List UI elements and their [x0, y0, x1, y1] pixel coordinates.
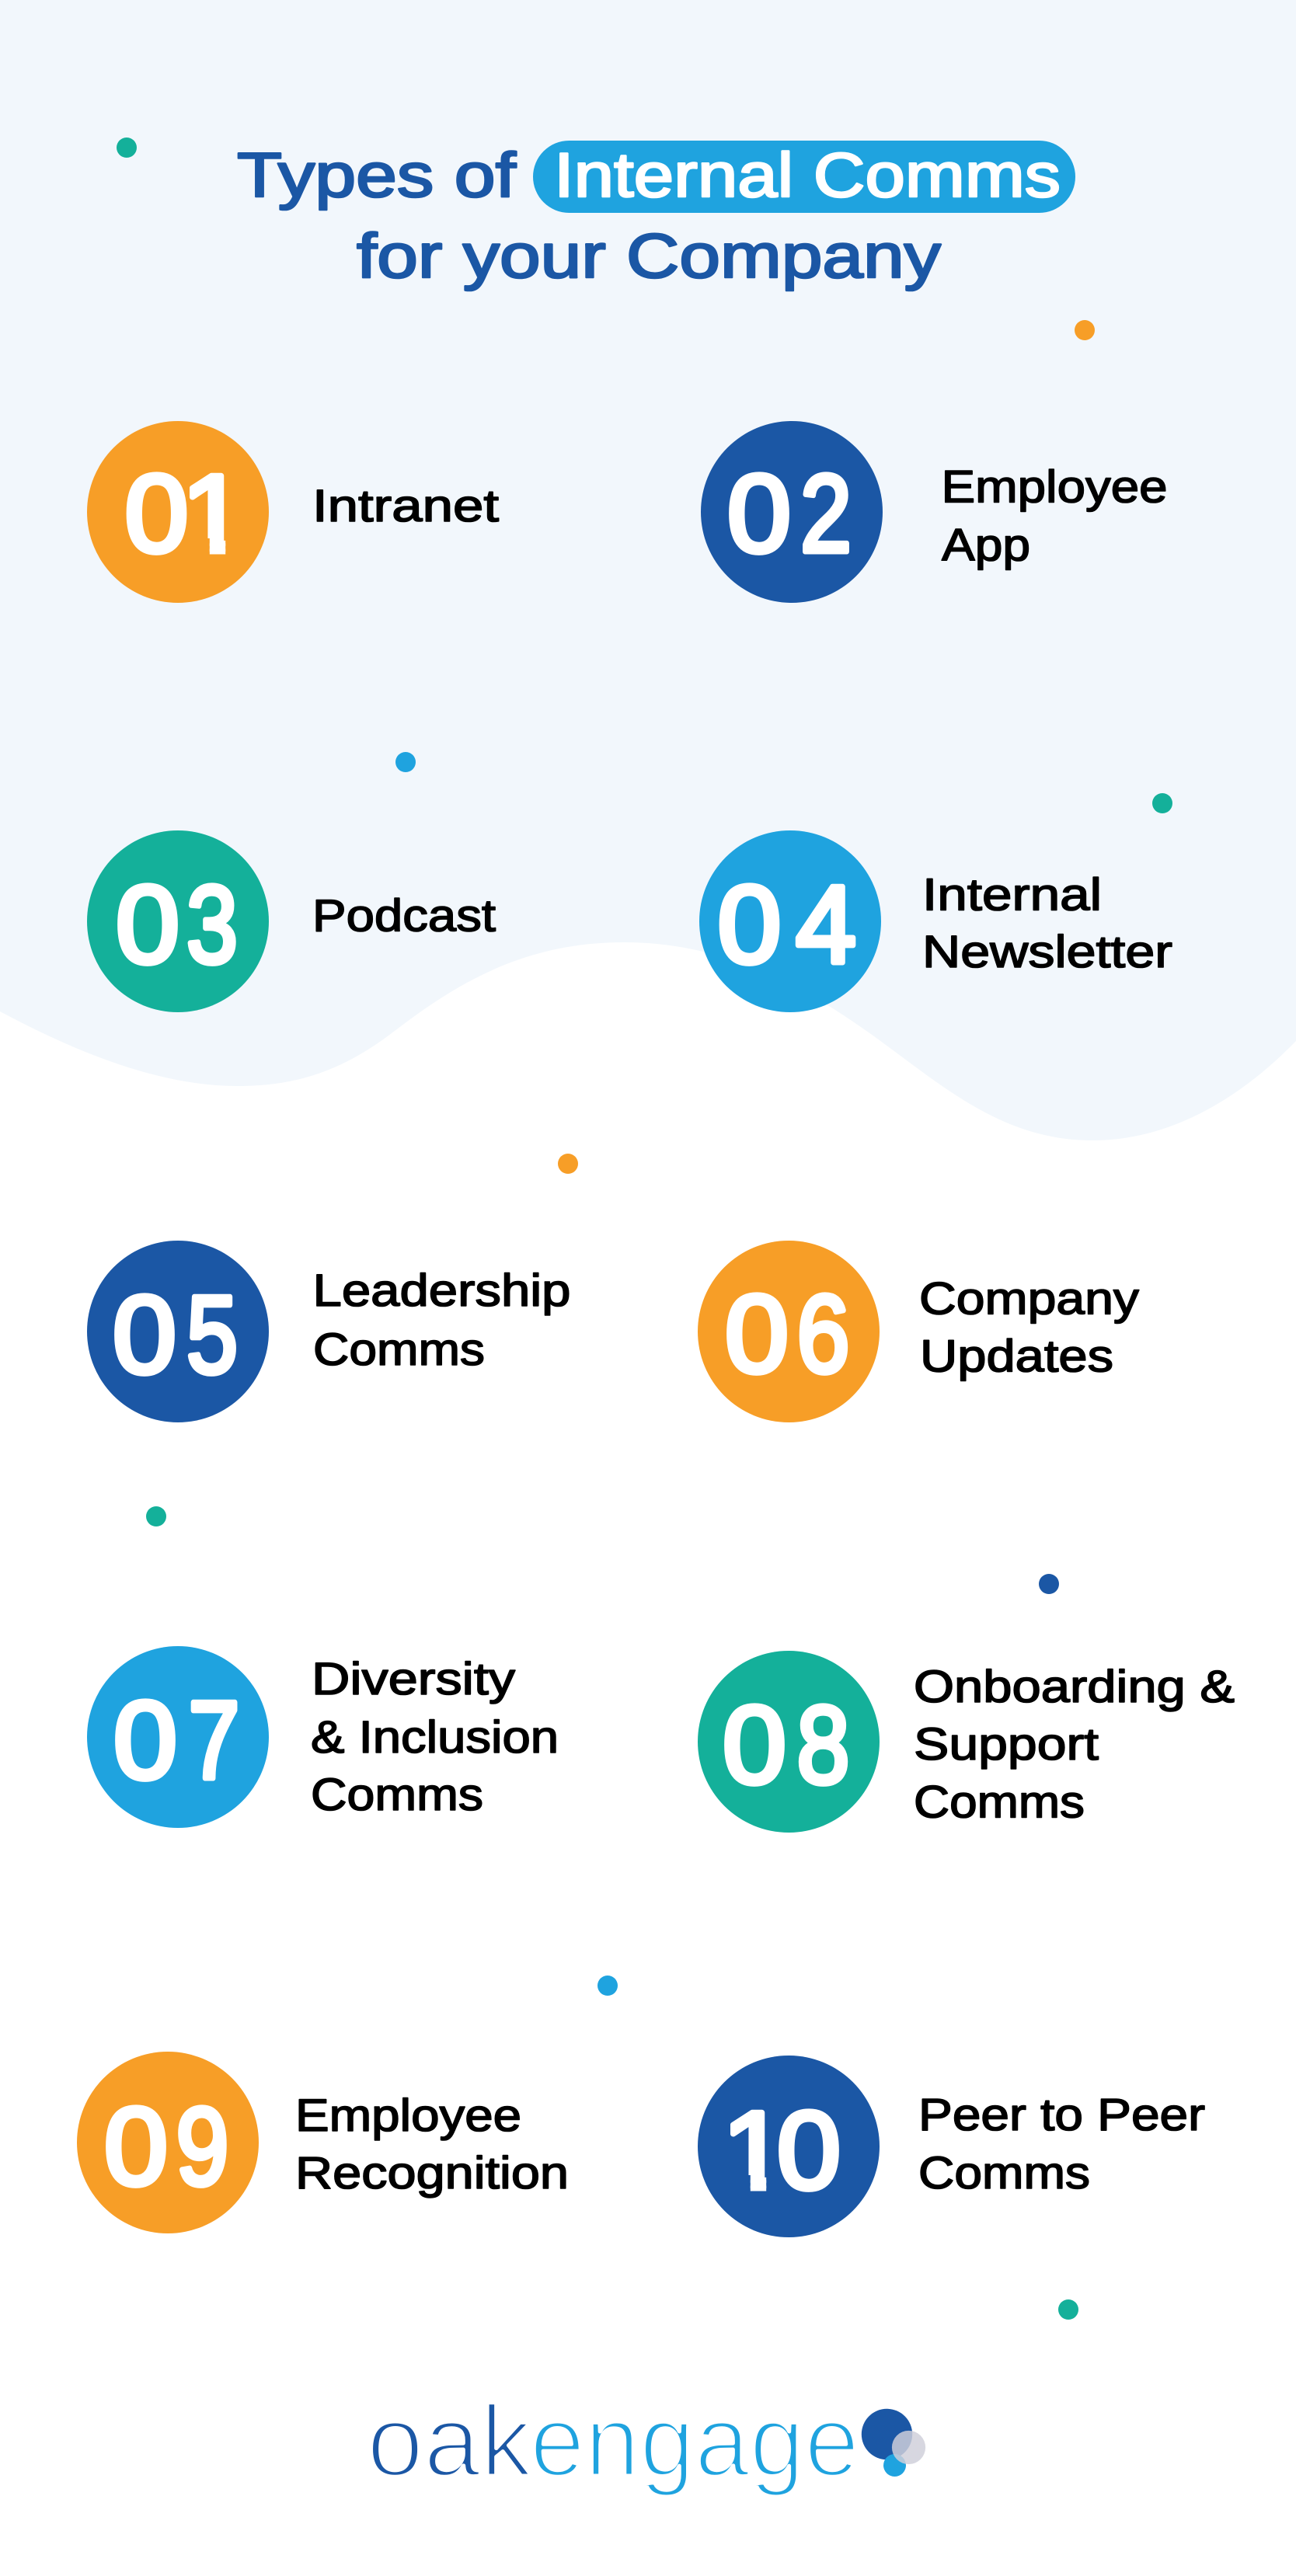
decorative dot: green left [146, 1506, 166, 1526]
item 07: Diversity & Inclusion Comms: 0 [113, 1679, 177, 1802]
item 10: Peer to Peer Comms: Peer to Peer [918, 2090, 1205, 2140]
item 05: Leadership Comms: Leadership [312, 1265, 570, 1316]
decorative dot: blue lower [597, 1976, 618, 1996]
item 06: Company Updates [698, 1241, 1139, 1422]
logo: oakengage: engage [530, 2384, 859, 2498]
decorative dot: green right [1152, 793, 1172, 813]
item 05: Leadership Comms: 5 [186, 1273, 238, 1397]
item 04: Internal Newsletter: Newsletter [922, 927, 1172, 977]
title: Types of [237, 141, 517, 211]
item 01: Intranet: Intranet [312, 481, 499, 531]
item 07: Diversity & Inclusion Comms: 7 [188, 1679, 239, 1802]
title [237, 141, 1075, 291]
item 05: Leadership Comms [87, 1241, 570, 1422]
item 10: Peer to Peer Comms: 0 [777, 2089, 841, 2212]
item 03: Podcast: 0 [116, 863, 179, 987]
item 05: Leadership Comms: 0 [113, 1273, 176, 1397]
item 02: Employee App [701, 421, 1167, 603]
item 01: Intranet: 1 [181, 452, 246, 576]
item 09: Employee Recognition [77, 2052, 569, 2233]
decorative dot: blue [395, 752, 416, 772]
decorative dot: green bottom [1058, 2299, 1078, 2320]
decorative dot: orange top right [1075, 320, 1095, 340]
item 06: Company Updates: 6 [797, 1272, 850, 1396]
item 10: Peer to Peer Comms: 1 [722, 2089, 787, 2212]
item 02: Employee App: 0 [727, 452, 791, 576]
item 09: Employee Recognition: 9 [176, 2085, 228, 2209]
item 06: Company Updates: Updates [920, 1332, 1113, 1382]
item 09: Employee Recognition: Recognition [295, 2148, 569, 2198]
item 06: Company Updates: Company [919, 1274, 1139, 1325]
item 08: Onboarding & Support Comms: Onboarding & [914, 1662, 1235, 1712]
item 08: Onboarding & Support Comms: Support [914, 1719, 1099, 1770]
background wave panel [0, 0, 1296, 1140]
item 01: Intranet [87, 421, 499, 603]
item 04: Internal Newsletter: 0 [718, 863, 782, 987]
decorative dot: orange centre [558, 1154, 578, 1174]
decorative dot: green top left [117, 138, 137, 158]
item 04: Internal Newsletter: Internal [922, 870, 1102, 920]
item 05: Leadership Comms: Comms [313, 1325, 485, 1375]
item 07: Diversity & Inclusion Comms [87, 1646, 559, 1828]
item 10: Peer to Peer Comms [698, 2056, 1205, 2237]
item 07: Diversity & Inclusion Comms: Comms [311, 1770, 483, 1820]
item 07: Diversity & Inclusion Comms: & Inclusion [311, 1712, 559, 1763]
logo: oakengage [367, 2384, 925, 2498]
item 09: Employee Recognition: 0 [104, 2085, 168, 2209]
item 02: Employee App: App [942, 520, 1030, 570]
item 01: Intranet: 0 [124, 452, 188, 576]
item 06: Company Updates: 0 [725, 1272, 789, 1396]
decorative dot: navy [1039, 1574, 1059, 1594]
title: Internal Comms [554, 141, 1061, 211]
item 07: Diversity & Inclusion Comms: Diversity [312, 1654, 515, 1704]
item 04: Internal Newsletter: 4 [796, 863, 856, 987]
item 02: Employee App: Employee [942, 461, 1167, 513]
title: for your Company [357, 221, 942, 291]
item 03: Podcast: Podcast [312, 891, 496, 942]
logo: oakengage: oak [367, 2384, 532, 2498]
item 02: Employee App: 2 [800, 452, 852, 576]
item 04: Internal Newsletter [699, 830, 1172, 1012]
item 08: Onboarding & Support Comms: 0 [723, 1683, 786, 1807]
item 10: Peer to Peer Comms: Comms [918, 2148, 1090, 2198]
item 08: Onboarding & Support Comms: 8 [797, 1683, 850, 1807]
item 03: Podcast: 3 [186, 863, 238, 987]
item 08: Onboarding & Support Comms [698, 1651, 1235, 1833]
item 08: Onboarding & Support Comms: Comms [914, 1777, 1085, 1828]
item 03: Podcast [87, 830, 496, 1012]
item 09: Employee Recognition: Employee [295, 2090, 521, 2141]
